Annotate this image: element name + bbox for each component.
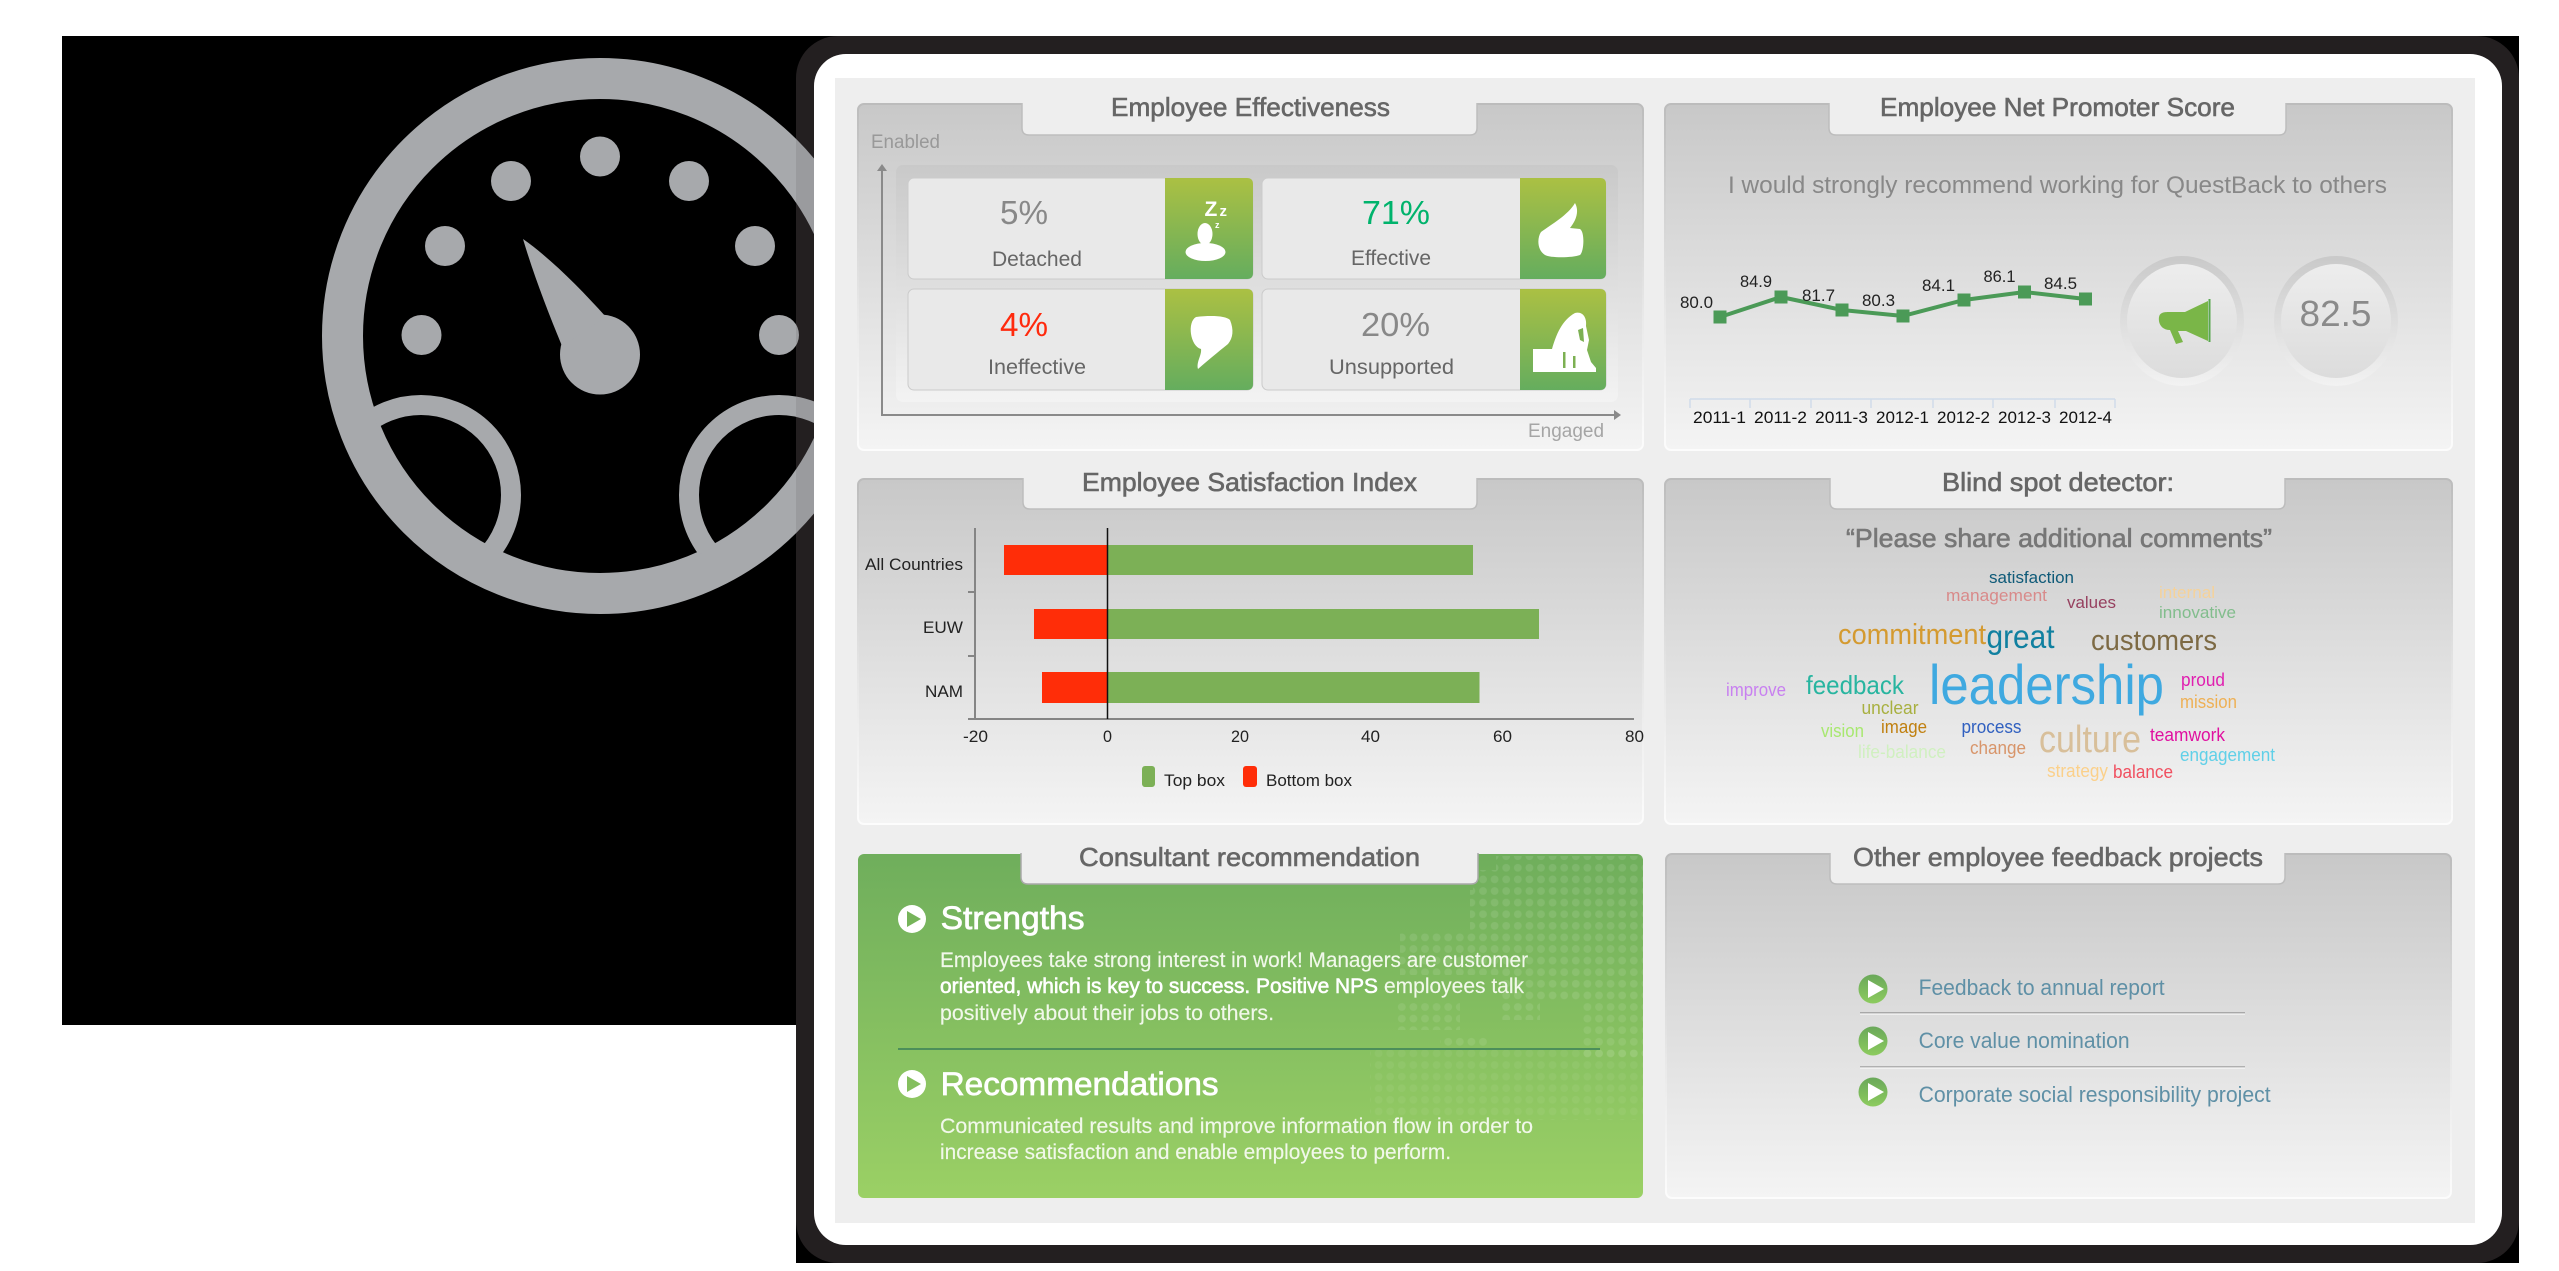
icon: sleeping person: Z: [1204, 198, 1218, 221]
word cloud: balance: [2113, 762, 2173, 782]
bar chart: -20: [963, 727, 988, 746]
quadrant: unsupported: [1262, 289, 1606, 390]
bar chart: 20: [1231, 727, 1249, 746]
device frame: [796, 36, 2519, 1263]
quadrant: unsupported: 20%: [1361, 306, 1430, 343]
panel: consultant recommendation: [858, 842, 1643, 1198]
list item: core value: Core value nomination: [1919, 1028, 2130, 1053]
line chart: 81.7: [1802, 286, 1835, 305]
word cloud: great: [1986, 618, 2054, 655]
word cloud: commitment: [1838, 619, 1986, 651]
dial seen through frame edge: [796, 139, 814, 533]
icon: play bullet: [898, 1070, 926, 1098]
word cloud: innovative: [2159, 603, 2236, 622]
quadrant: detached: 5%: [1000, 194, 1048, 231]
word cloud: culture: [2039, 719, 2141, 761]
panel: other employee feedback projects: [1666, 842, 2451, 1198]
heading: Other employee feedback projects: [1853, 842, 2263, 872]
icon: sleeping person: z: [1220, 203, 1227, 220]
section: strengths: Strengths: [941, 900, 1085, 936]
list item: annual report: [1858, 974, 2165, 1004]
quadrant: detached: [908, 178, 1253, 279]
bar chart: 80: [1625, 727, 1644, 746]
score badge: [2274, 256, 2398, 386]
question text: “Please share additional comments”: [1846, 523, 2272, 553]
line chart: 80.3: [1862, 291, 1895, 310]
device backing: [796, 36, 2519, 1263]
quadrant: unsupported: Unsupported: [1329, 356, 1454, 379]
word cloud: image: [1881, 717, 1927, 737]
line chart: [1680, 267, 2115, 427]
line chart: 84.9: [1740, 272, 1772, 291]
word cloud: satisfaction: [1989, 568, 2074, 587]
line chart: 2012-3: [1998, 408, 2051, 427]
icon: speedometer dial: [331, 78, 869, 594]
quadrant: ineffective: 4%: [1000, 306, 1048, 343]
bar chart: NAM: [925, 682, 963, 701]
icon: sleeping person: [1186, 198, 1227, 261]
section: recommendations: Recommendations: [941, 1066, 1219, 1102]
heading: Blind spot detector:: [1942, 467, 2174, 497]
axis label: enabled: Enabled: [871, 132, 940, 153]
word cloud: unclear: [1862, 698, 1918, 718]
line chart: 2011-2: [1754, 408, 1807, 427]
word cloud: customers: [2091, 625, 2217, 657]
bar chart: 40: [1361, 727, 1380, 746]
section: strengths: [898, 900, 1528, 1025]
icon: sitting figure: [1533, 313, 1596, 372]
heading: Employee Satisfaction Index: [1082, 467, 1417, 497]
quadrant: ineffective: [908, 289, 1253, 390]
line chart: 84.5: [2044, 274, 2077, 293]
legend: Bottom box: [1266, 771, 1352, 790]
score badge: 82.5: [2300, 293, 2372, 334]
background block: [62, 36, 2519, 1025]
section: recommendations: Communicated results and improve information flow in order to: [940, 1114, 1533, 1138]
word cloud: change: [1970, 738, 2026, 758]
word cloud: strategy: [2047, 761, 2108, 781]
word cloud: internal: [2159, 583, 2215, 602]
quadrant: effective: Effective: [1351, 247, 1431, 270]
quadrant: effective: 71%: [1362, 194, 1430, 231]
word cloud: vision: [1821, 721, 1864, 741]
panel: blind spot detector: [1665, 467, 2452, 824]
line chart: 2011-1: [1693, 408, 1746, 427]
list item: core value: [1858, 1026, 2130, 1056]
icon: megaphone badge: [2120, 256, 2244, 386]
word cloud: life-balance: [1858, 742, 1946, 762]
line chart: 84.1: [1922, 276, 1955, 295]
section: strengths: Employees take strong interest in work! Managers are customer: [940, 948, 1528, 972]
legend: Top box: [1164, 771, 1226, 790]
line chart: 86.1: [1984, 267, 2016, 286]
quadrant: detached: Detached: [992, 248, 1082, 271]
section: strengths: positively about their jobs to others.: [940, 1001, 1274, 1025]
question text: I would strongly recommend working for QuestBack to others: [1728, 172, 2387, 199]
line chart: 80.0: [1680, 293, 1713, 312]
icon: thumb down: [1191, 316, 1232, 369]
quadrant: effective: [1262, 178, 1606, 279]
axis label: engaged: Engaged: [1528, 421, 1604, 442]
quadrant: ineffective: Ineffective: [988, 356, 1086, 379]
line chart: 2011-3: [1815, 408, 1868, 427]
panel: employee net promoter score: [1665, 92, 2452, 450]
line chart: 2012-2: [1937, 408, 1990, 427]
word cloud: teamwork: [2150, 725, 2226, 745]
list item: annual report: Feedback to annual report: [1919, 975, 2165, 1000]
line chart: 2012-4: [2059, 408, 2112, 427]
word cloud: values: [2067, 593, 2116, 612]
icon: play bullet: [898, 905, 926, 933]
bar chart: 0: [1103, 727, 1112, 746]
section: recommendations: [898, 1066, 1533, 1164]
word cloud: proud: [2181, 670, 2225, 690]
quadrant backing: [896, 165, 1618, 402]
word cloud: improve: [1726, 680, 1786, 700]
line chart: 2012-1: [1876, 408, 1929, 427]
bar chart: EUW: [923, 618, 963, 637]
white screen: [814, 54, 2502, 1245]
matrix axes: [877, 164, 1621, 420]
legend: [1142, 766, 1352, 790]
heading: Consultant recommendation: [1079, 842, 1420, 872]
icon: thumb up: [1538, 203, 1583, 257]
word cloud: [1726, 568, 2275, 782]
bar chart: [865, 528, 1644, 790]
word cloud: management: [1946, 586, 2047, 605]
section: strengths: employees talk: [1384, 974, 1524, 998]
heading: Employee Net Promoter Score: [1880, 92, 2235, 122]
word cloud: mission: [2180, 692, 2237, 712]
word cloud: feedback: [1806, 670, 1905, 700]
section: strengths: oriented, which is key to success. Positive NPS: [940, 974, 1378, 998]
word cloud: process: [1962, 717, 2022, 737]
dashboard panel: [835, 78, 2475, 1223]
section: recommendations: increase satisfaction and enable employees to perform.: [940, 1140, 1451, 1164]
word cloud: engagement: [2180, 745, 2275, 765]
icon: sleeping person: z: [1215, 220, 1220, 230]
list item: csr project: Corporate social responsibility project: [1919, 1082, 2271, 1107]
world map dots: [1398, 856, 1643, 1058]
word cloud: leadership: [1929, 653, 2164, 716]
panel: employee satisfaction index: [858, 467, 1644, 824]
heading: Employee Effectiveness: [1111, 92, 1390, 122]
bar chart: All Countries: [865, 555, 963, 574]
panel: employee effectiveness: [858, 92, 1643, 450]
bar chart: 60: [1493, 727, 1512, 746]
